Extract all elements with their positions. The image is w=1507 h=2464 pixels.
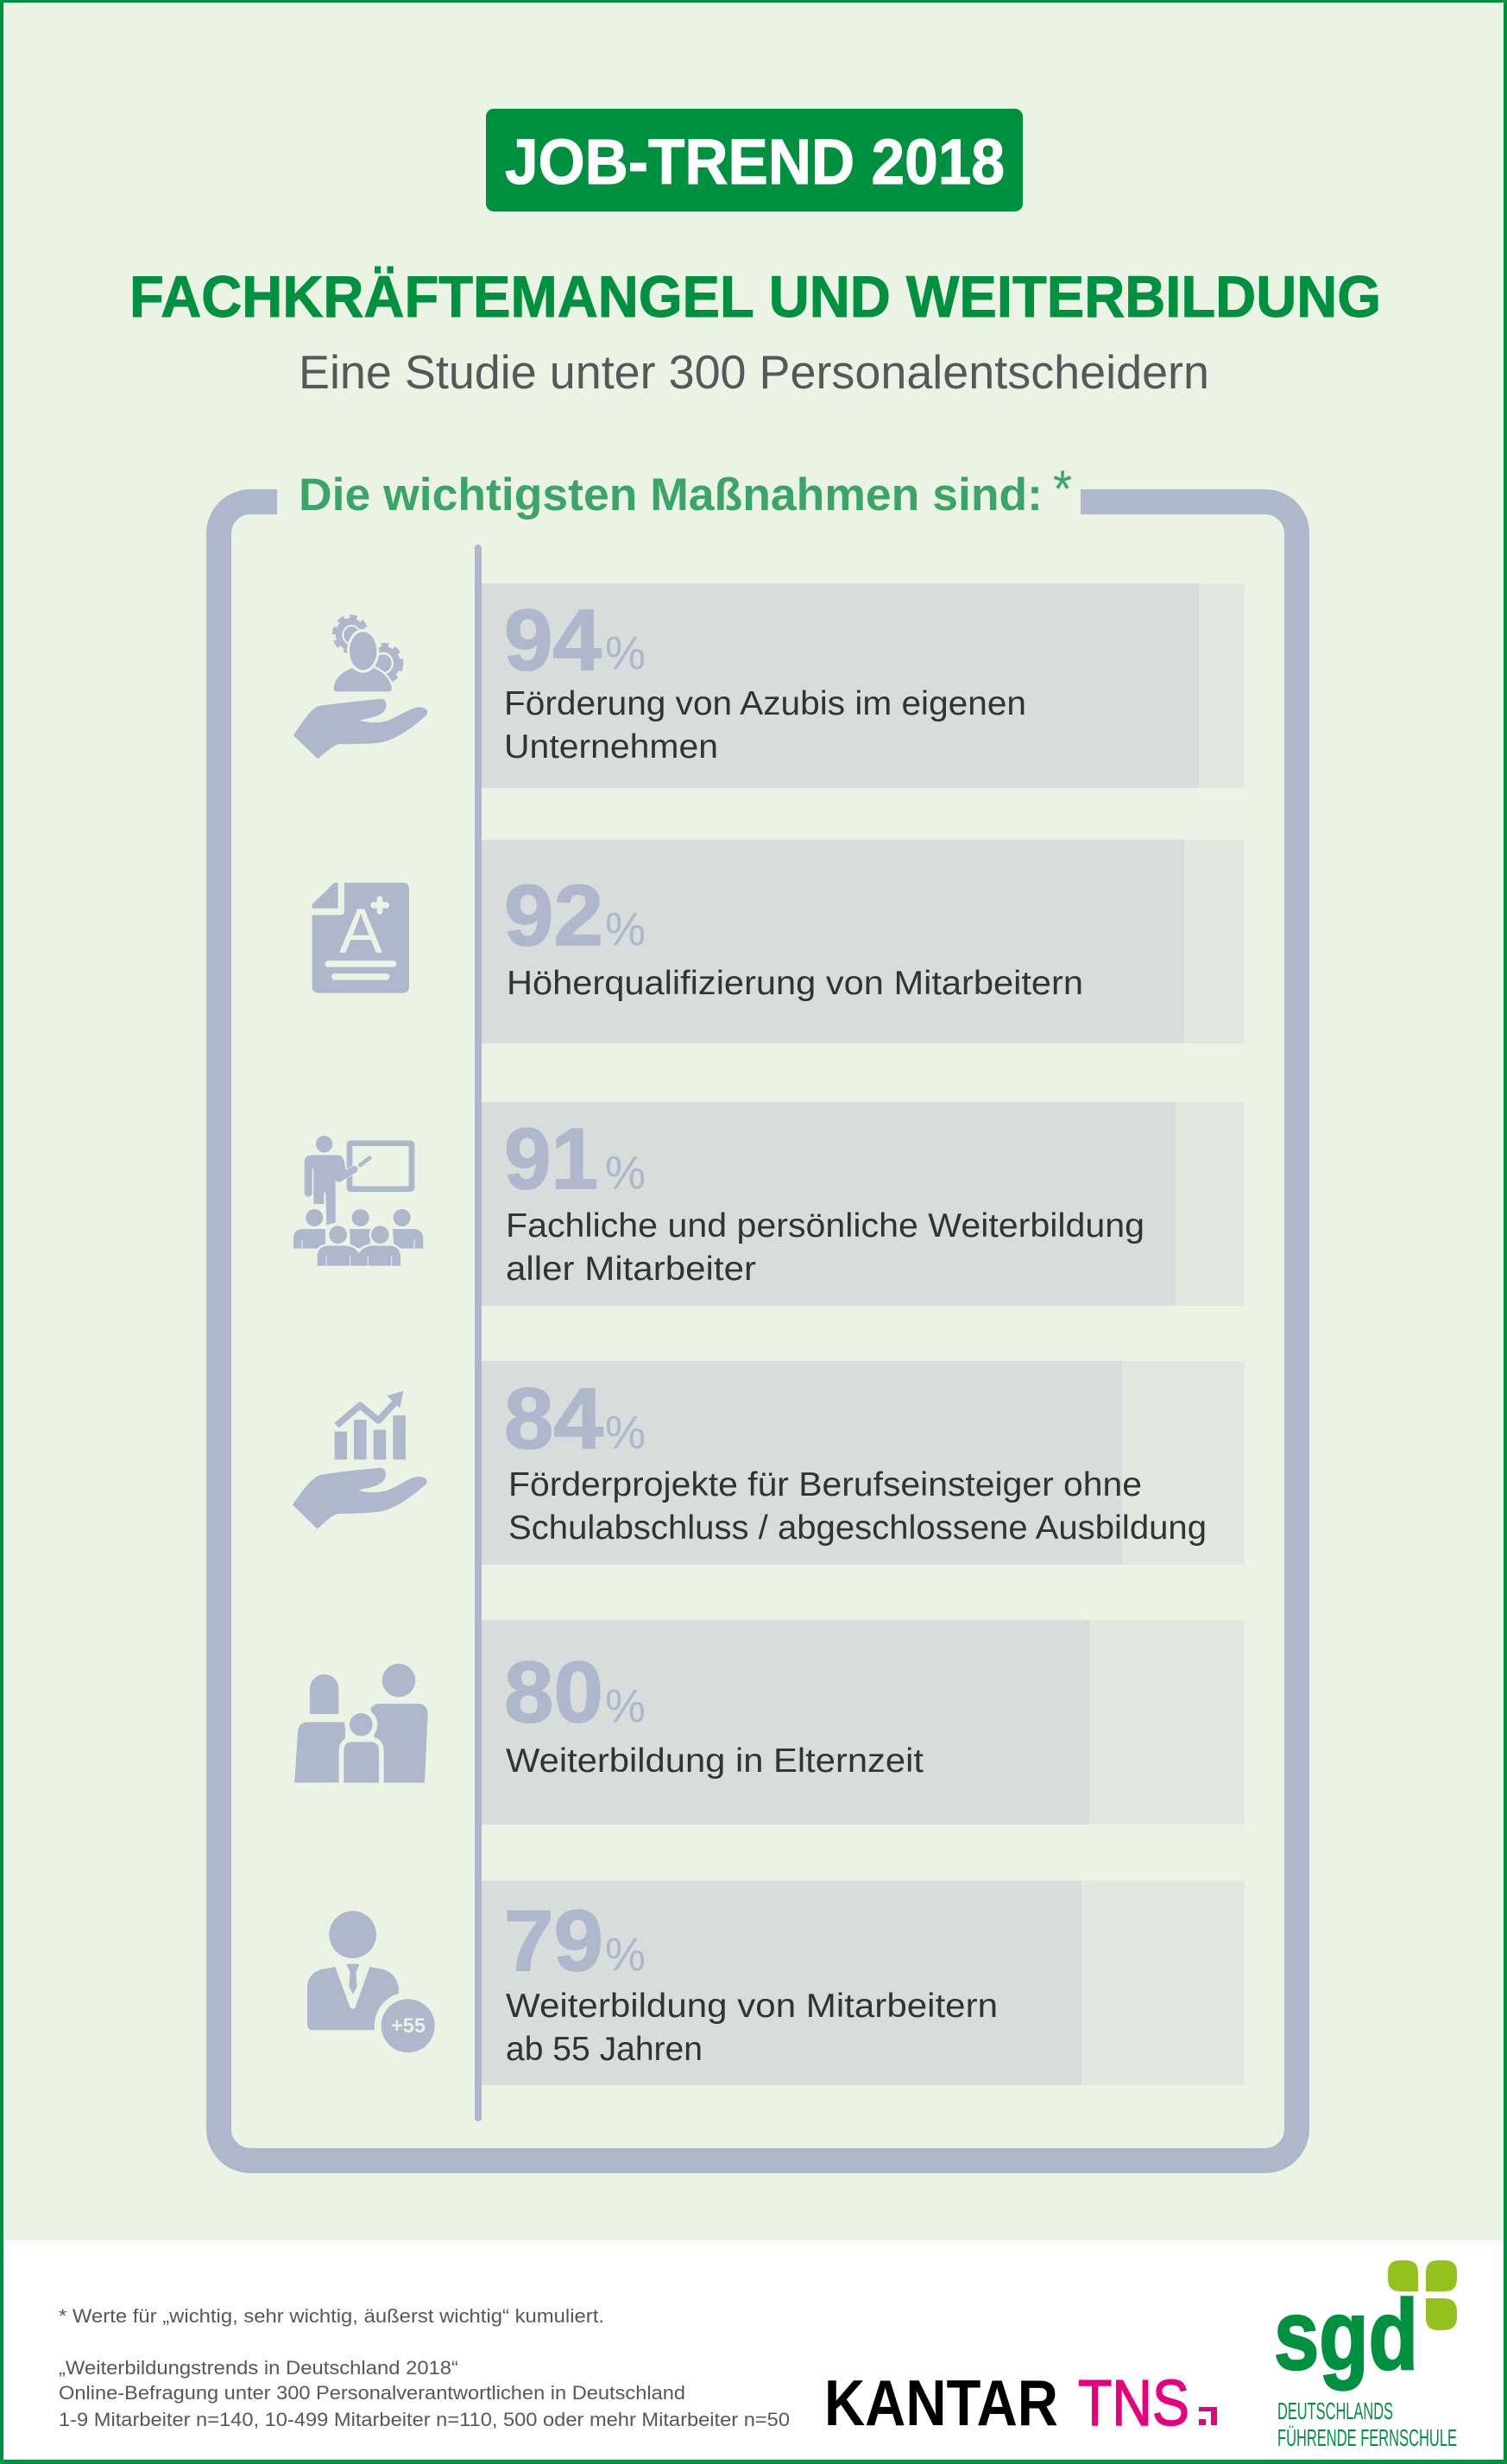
bar row: 94%: Unternehmen <box>504 728 718 766</box>
icon: employee aged 55 plus: +55 <box>391 2014 426 2038</box>
vertical axis line <box>475 545 482 2121</box>
bar row: 92% <box>482 840 1245 1043</box>
bar row: 84%: 84 <box>504 1371 603 1467</box>
bar row: 84%: Förderprojekte für Berufseinsteiger ohne <box>508 1466 1142 1503</box>
footer: footnote and sources: * Werte für „wichtig, sehr wichtig, äußerst wichtig“ kumuliert. <box>59 2305 604 2327</box>
icon: teacher with audience <box>293 1136 423 1266</box>
panel heading: Die wichtigsten Maßnahmen sind: <box>299 469 1043 520</box>
clover leaves <box>1388 2260 1457 2330</box>
bar row: 80%: % <box>605 1680 646 1732</box>
bar row: 79%: % <box>605 1929 646 1981</box>
footer: footnote and sources: 1-9 Mitarbeiter n=140, 10-499 Mitarbeiter n=110, 500 oder mehr Mitarbeiter n=50 <box>59 2409 790 2430</box>
bar row: 94% <box>482 583 1245 788</box>
panel heading: * <box>1053 460 1072 518</box>
logo: Kantar TNS: TNS <box>1078 2366 1189 2439</box>
bar row: 94%: 94 <box>504 592 602 689</box>
bar row: 92%: 92 <box>504 867 603 964</box>
bar row: 79%: ab 55 Jahren <box>506 2031 703 2068</box>
footer: footnote and sources <box>59 2305 790 2430</box>
logo: sgd: DEUTSCHLANDS <box>1277 2398 1393 2424</box>
bar row: 79%: 79 <box>504 1893 603 1989</box>
icon: family with child <box>294 1664 428 1792</box>
bar row: 91%: % <box>605 1147 646 1199</box>
bar row: 84%: % <box>605 1407 646 1459</box>
icon: graded document A+: A <box>339 897 382 967</box>
logo: Kantar TNS: KANTAR <box>824 2366 1058 2439</box>
panel: frame with measures <box>219 460 1296 2161</box>
bar row: 91%: Fachliche und persönliche Weiterbildung <box>506 1207 1144 1245</box>
bar row: 91%: aller Mitarbeiter <box>506 1251 756 1288</box>
logo: sgd: sgd <box>1274 2280 1418 2391</box>
bar row: 84% <box>482 1361 1245 1565</box>
bar row: 92%: % <box>605 904 646 955</box>
icon: employee aged 55 plus <box>307 1911 442 2059</box>
badge: Job-Trend 2018: JOB-TREND 2018 <box>505 126 1005 198</box>
bar row: 94%: % <box>605 627 646 679</box>
footer: footnote and sources: Online-Befragung unter 300 Personalverantwortlichen in Deutschland <box>59 2382 685 2404</box>
footer: footnote and sources: „Weiterbildungstrends in Deutschland 2018“ <box>59 2357 458 2379</box>
logo: sgd <box>1274 2260 1457 2451</box>
bar row: 80%: 80 <box>504 1644 603 1741</box>
bar row: 91% <box>482 1102 1245 1306</box>
icon: hand holding growth chart <box>293 1391 427 1529</box>
bar row: 79%: Weiterbildung von Mitarbeitern <box>506 1988 998 2025</box>
subtitle: Eine Studie unter 300 Personalentscheidern <box>299 345 1209 399</box>
bar row: 79% <box>482 1881 1245 2085</box>
badge: Job-Trend 2018 <box>486 109 1023 211</box>
bar row: 80% <box>482 1620 1245 1824</box>
icon: graded document A+ <box>312 883 409 993</box>
bar row: 94%: Förderung von Azubis im eigenen <box>504 685 1026 722</box>
bar row: 84%: Schulabschluss / abgeschlossene Ausbildung <box>508 1509 1207 1547</box>
bar row: 92%: Höherqualifizierung von Mitarbeitern <box>507 965 1083 1002</box>
title: FACHKRÄFTEMANGEL UND WEITERBILDUNG <box>129 264 1381 330</box>
bar row: 91%: 91 <box>504 1111 598 1207</box>
icon: hand holding person with gears <box>293 617 427 759</box>
logo: Kantar TNS <box>824 2366 1217 2439</box>
bar row: 80%: Weiterbildung in Elternzeit <box>506 1742 924 1780</box>
